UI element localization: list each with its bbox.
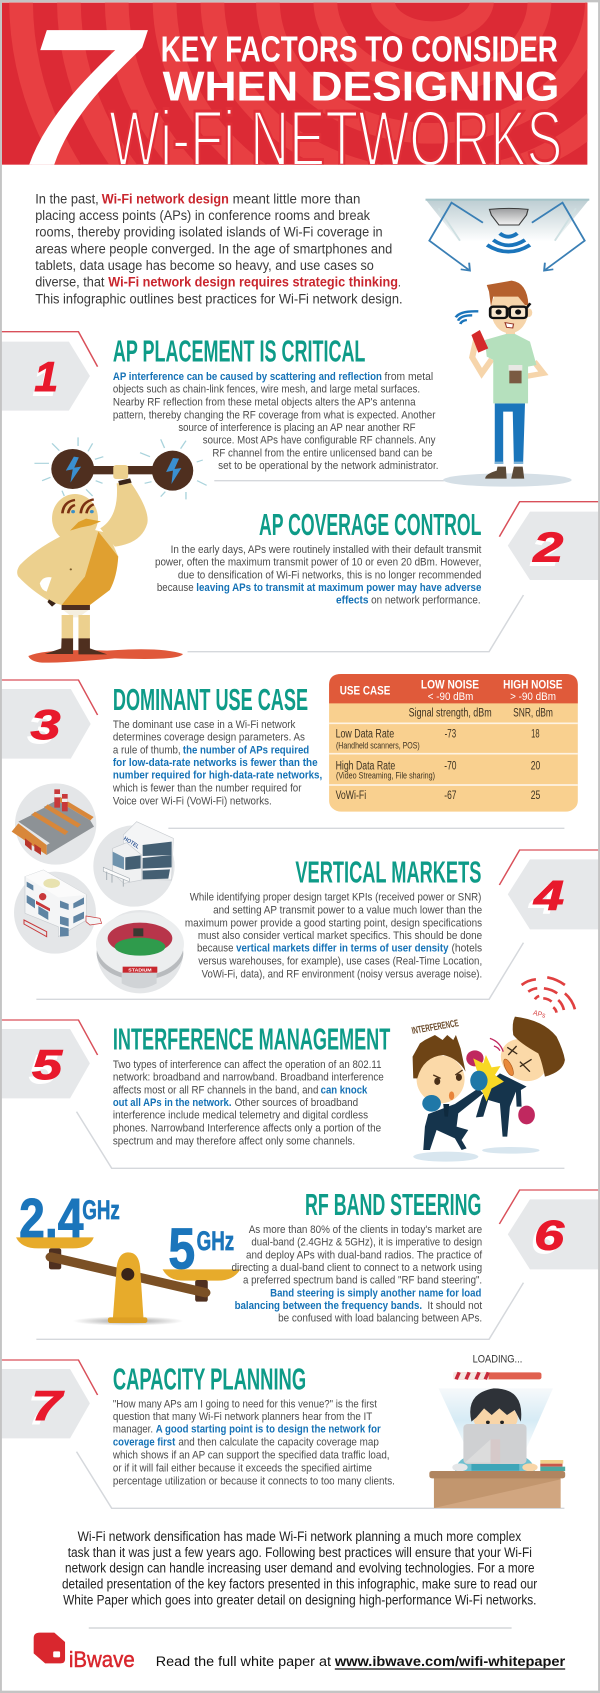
body text: vertical markets [185, 890, 482, 980]
body text: dominant use case: a rule of thumb, [113, 743, 181, 756]
hexagon badge 1 [0, 332, 98, 411]
intro text [35, 192, 403, 307]
label: 5 GHz: GHz [197, 1227, 234, 1257]
table rows: SNR, dBm [513, 706, 553, 719]
body text: interference [113, 1058, 384, 1147]
table header: USE CASE [340, 683, 391, 697]
header banner [2, 2, 588, 165]
body text: AP placement: RF channel from the entire unlicensed band can be [212, 446, 433, 459]
icon: hotel: HOTEL [122, 836, 140, 851]
table rows: -73 [445, 727, 456, 740]
body text: dominant use case: Voice over Wi-Fi (VoWi-Fi) networks. [113, 794, 272, 807]
body text: interference: Two types of interference can affect the operation of an 802.11 [113, 1058, 382, 1071]
body text: interference: Other sources of broadband [235, 1096, 358, 1109]
icon: hospital [14, 870, 102, 954]
body text: capacity planning: "How many APs am I going to need for this venue?" is the first [113, 1397, 377, 1410]
call to action: Read the full white paper at [156, 1654, 332, 1670]
hexagon badge 3: 3 [27, 707, 56, 753]
logo: iBwave [34, 1633, 135, 1673]
body text: capacity planning: manager. [113, 1422, 153, 1435]
intro text: meant little more than [233, 192, 360, 207]
body text: dominant use case: number required for high-data-rate networks, [113, 768, 322, 781]
body text: RF band steering: balancing between the frequency bands. [235, 1299, 422, 1312]
body text: dominant use case: for low-data-rate networks is fewer than the [113, 756, 318, 769]
body text: RF band steering: and deploy APs with dual-band radios. The practice of [246, 1248, 483, 1261]
body text: AP placement: source of interference is placing an AP near another RF [178, 421, 416, 434]
table rows: 20 [531, 759, 540, 772]
icon: strongman with dumbbell [17, 437, 207, 663]
body text: vertical markets: because [197, 941, 234, 954]
body text: dominant use case: which is fewer than the number required for [112, 781, 302, 794]
body text: vertical markets: While identifying proper design target KPIs (received power or SNR) [190, 890, 481, 903]
table header [340, 677, 563, 703]
body text: RF band steering [232, 1223, 483, 1324]
section 3 and 4 block [0, 674, 600, 999]
hexagon badge 3: 3 [31, 703, 61, 748]
body text: AP placement: objects such as chain-link fences, wire mesh, and large metal surfaces. [113, 382, 420, 395]
body text: dominant use case: determines coverage design parameters. As [113, 730, 305, 743]
table rows: Low Data Rate [336, 727, 394, 740]
body text: AP coverage: on network performance. [371, 593, 481, 606]
section 1 and 2 block [0, 281, 600, 663]
icon: loading at desk: LOADING... [473, 1352, 522, 1365]
body text: vertical markets: (hotels [452, 941, 482, 954]
intro text: This infographic outlines best practices for Wi-Fi network design. [35, 292, 403, 307]
intro text: Wi-Fi network design requires strategic thinking [108, 276, 398, 290]
body text: interference: can knock [321, 1083, 368, 1096]
body text: capacity planning: which shows if an AP can support the specified data traffic load, [112, 1448, 390, 1461]
hexagon badge 2 [499, 502, 600, 580]
body text: AP placement: source. Most APs have configurable RF channels. Any [203, 433, 436, 446]
body text: AP coverage: effects [336, 593, 369, 606]
icon: hotel [93, 822, 175, 907]
body text: RF band steering: As more than 80% of the clients in today's market are [249, 1223, 482, 1236]
table rows: High Data Rate [336, 759, 395, 772]
table rows: -67 [444, 789, 457, 802]
body text: AP placement [113, 370, 439, 472]
label: 5 GHz [168, 1217, 234, 1281]
data table [329, 674, 578, 812]
hexagon badge 4: 4 [528, 878, 558, 923]
hexagon badge 4 [499, 850, 600, 929]
body text: AP placement: AP interference can be caused by scattering and reflection [113, 370, 382, 383]
body text: interference: affects most or all RF channels in the band, and [113, 1083, 318, 1096]
body text: dominant use case: The dominant use case in a Wi-Fi network [113, 718, 296, 731]
title line 2: WHEN DESIGNING [163, 63, 559, 110]
hexagon badge 5: 5 [28, 1047, 59, 1093]
body text: interference: phones. Narrowband Interference affects only a portion of the [113, 1121, 381, 1134]
table header: LOW NOISE [421, 677, 479, 691]
body text: capacity planning [112, 1397, 395, 1487]
icon: boxing businessmen [411, 977, 575, 1162]
label: 2.4 GHz: GHz [82, 1196, 120, 1226]
icon: boxing businessmen: APs [532, 1008, 547, 1020]
hexagon badge 7 [0, 1360, 98, 1438]
icon: stadium: STADIUM [128, 967, 152, 972]
intro text: Wi-Fi network design [102, 192, 229, 207]
hexagon badge 1: 1 [34, 355, 58, 400]
body text: capacity planning: percentage utilization or because it connects to too many clients. [113, 1474, 395, 1487]
body text: RF band steering: a preferred spectrum band is called "RF band steering". [243, 1273, 482, 1286]
section 7 and footer block [0, 1352, 565, 1673]
scale illustration [16, 1186, 240, 1326]
heading: AP placement: AP PLACEMENT IS CRITICAL [113, 335, 365, 369]
body text: RF band steering: dual-band (2.4GHz & 5GHz), it is imperative to design [251, 1235, 482, 1248]
table rows [336, 706, 553, 802]
intro text: rooms, thereby providing isolated islands of Wi-Fi coverage in [35, 226, 383, 240]
call to action: www.ibwave.com/wifi-whitepaper [334, 1654, 565, 1670]
icon: factory [12, 783, 96, 865]
icon: loading at desk [429, 1352, 565, 1508]
body text: AP coverage: In the early days, APs were routinely installed with their default transmit [171, 543, 482, 556]
body text: capacity planning: question that many Wi-Fi network planners hear from the IT [113, 1410, 373, 1423]
hexagon badge 5: 5 [32, 1043, 63, 1088]
label: 2.4 GHz: 2.4 [19, 1186, 84, 1249]
hexagon badge 4: 4 [533, 874, 564, 919]
hexagon badge 5 [0, 1020, 98, 1098]
intro text: areas where people converged. In the age of smartphones and [35, 243, 392, 257]
body text: interference: spectrum and may therefore affect only some channels. [113, 1134, 355, 1147]
table rows: (Handheld scanners, POS) [336, 741, 420, 751]
body text: interference: out all APs in the network. [113, 1096, 232, 1109]
body text: RF band steering: It should not [427, 1299, 483, 1312]
call to action [156, 1654, 565, 1670]
body text: interference: network: broadband and narrowband. Broadband interference [113, 1070, 384, 1083]
intro text: diverse, that [35, 276, 104, 290]
intro text: placing access points (APs) in conference rooms and break [35, 209, 371, 224]
hexagon badge 7: 7 [28, 1388, 59, 1434]
body text: RF band steering: be confused with load balancing between APs. [278, 1311, 482, 1324]
body text: AP coverage: leaving APs to transmit at maximum power may have adverse [196, 581, 482, 594]
body text: AP placement: pattern, thereby changing the RF coverage from what is expected. Another [113, 408, 435, 421]
body text: vertical markets: and setting AP transmit power to a value much lower than the [213, 903, 482, 916]
intro text: In the past, [35, 192, 99, 207]
body text: AP coverage: due to densification of Wi-Fi networks, this is no longer recommended [178, 568, 481, 581]
table header: < -90 dBm [428, 690, 473, 703]
icon: ceiling access point [426, 199, 589, 271]
body text: capacity planning: coverage first [113, 1435, 175, 1448]
intro text: . [398, 276, 401, 290]
body text: vertical markets: VoWi-Fi, data), and RF environment (noisy versus average noise). [202, 967, 482, 980]
icon: stadium [96, 910, 184, 993]
icon: boxing businessmen: INTERFERENCE [411, 1018, 460, 1037]
table rows: 18 [531, 727, 540, 740]
body text: AP coverage: because [157, 581, 194, 594]
label: 5 GHz: 5 [168, 1217, 195, 1281]
body text: AP coverage: power, often the maximum transmit power of 10 or even 20 dBm. However, [155, 555, 481, 568]
body text: AP placement: Nearby RF reflection from these metal objects alters the AP's antenna [113, 395, 416, 408]
body text: vertical markets: vertical markets differ in terms of user density [236, 941, 449, 954]
hexagon badge 6 [499, 1190, 600, 1269]
logo: iBwave: iBwave [69, 1648, 135, 1673]
body text: interference: interference include medical telemetry and digital cordless [113, 1108, 368, 1121]
body text: vertical markets: must also consider vertical market specifics. This should be done [198, 929, 482, 942]
hexagon badge 7: 7 [31, 1384, 65, 1429]
hexagon badge 2: 2 [532, 525, 564, 571]
body text: AP placement: from metal [385, 370, 433, 383]
table header: > -90 dBm [510, 690, 556, 703]
hexagon badge 6: 6 [530, 1217, 560, 1263]
intro text: tablets, data usage has become so heavy, and use cases so [35, 259, 374, 274]
closing paragraph [62, 1530, 537, 1608]
body text: AP coverage [155, 543, 482, 606]
body text: capacity planning: or if it will fail either because it exceeds the specified airtime [113, 1461, 372, 1474]
table rows: Signal strength, dBm [409, 706, 492, 719]
body text: AP placement: set to be operational by the network administrator. [218, 459, 439, 472]
body text: RF band steering: Band steering is simply another name for load [270, 1286, 481, 1299]
table rows: 25 [531, 789, 540, 802]
body text: RF band steering: directing a dual-band client to connect to a network using [232, 1261, 482, 1274]
body text: vertical markets: maximum power provide a good starting point, design specifications [185, 916, 482, 929]
table rows: (Video Streaming, File sharing) [336, 771, 435, 781]
body text: dominant use case [112, 718, 322, 807]
table rows: VoWi-Fi [336, 789, 366, 802]
hexagon badge 6: 6 [534, 1213, 564, 1259]
body text: capacity planning: A good starting point is to design the network for [156, 1422, 381, 1435]
icon: man with phone [443, 281, 572, 487]
body text: vertical markets: versus warehouses, for example), use cases (Real-Time Location, [198, 954, 482, 967]
table header: HIGH NOISE [503, 677, 563, 691]
body text: capacity planning: and then calculate the capacity coverage map [178, 1435, 379, 1448]
body text: dominant use case: the number of APs required [183, 743, 309, 756]
hexagon badge 1: 1 [32, 360, 56, 405]
hexagon badge 3 [0, 680, 98, 759]
heading: capacity planning: CAPACITY PLANNING [113, 1362, 306, 1397]
table rows: -70 [444, 759, 457, 772]
hexagon badge 2: 2 [529, 530, 560, 575]
heading: dominant use case: DOMINANT USE CASE [113, 683, 308, 717]
section 5 and 6 block [0, 977, 600, 1339]
